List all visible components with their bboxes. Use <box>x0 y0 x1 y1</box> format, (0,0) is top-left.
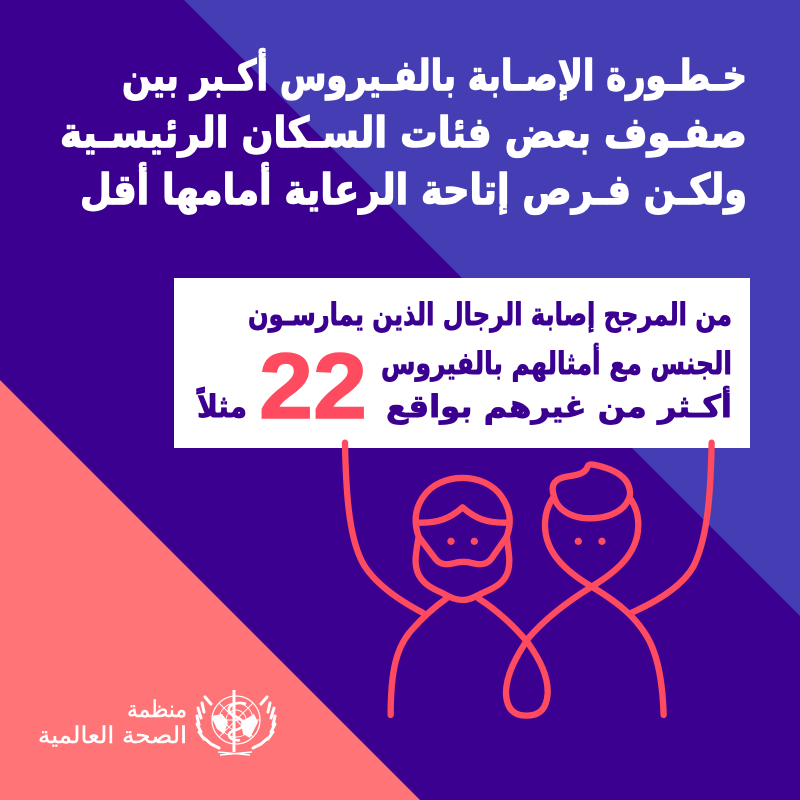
right body <box>592 587 664 715</box>
WHO logo text <box>38 697 187 749</box>
eyes <box>447 538 606 545</box>
right arm <box>632 443 712 613</box>
snake <box>229 703 246 740</box>
background: light purple triangle <box>184 0 800 616</box>
continents <box>211 714 258 738</box>
WHO logo text: الصحة العالمية <box>38 723 187 749</box>
callout: white statistic box <box>174 278 750 448</box>
title <box>60 48 747 215</box>
callout text: مثلاً <box>196 386 247 425</box>
WHO logo text: منظمة <box>127 697 187 723</box>
left arm <box>345 443 423 613</box>
illustration: two men with linked lines <box>345 443 712 716</box>
left body <box>391 598 447 715</box>
right hair <box>553 464 630 518</box>
fringe <box>417 507 508 523</box>
icon: WHO emblem <box>197 690 275 755</box>
callout text <box>196 297 732 425</box>
shared ribbon loop <box>478 587 592 716</box>
background: coral triangle <box>0 380 420 800</box>
left head and hair <box>416 478 510 537</box>
right head <box>545 498 592 587</box>
callout text: أكـثر من غيرهم بواقع <box>386 386 732 425</box>
wreath leaves <box>197 697 275 748</box>
moustache <box>419 537 507 564</box>
staff <box>232 690 236 752</box>
beard <box>416 537 509 600</box>
big number 22: 22 <box>259 334 367 438</box>
